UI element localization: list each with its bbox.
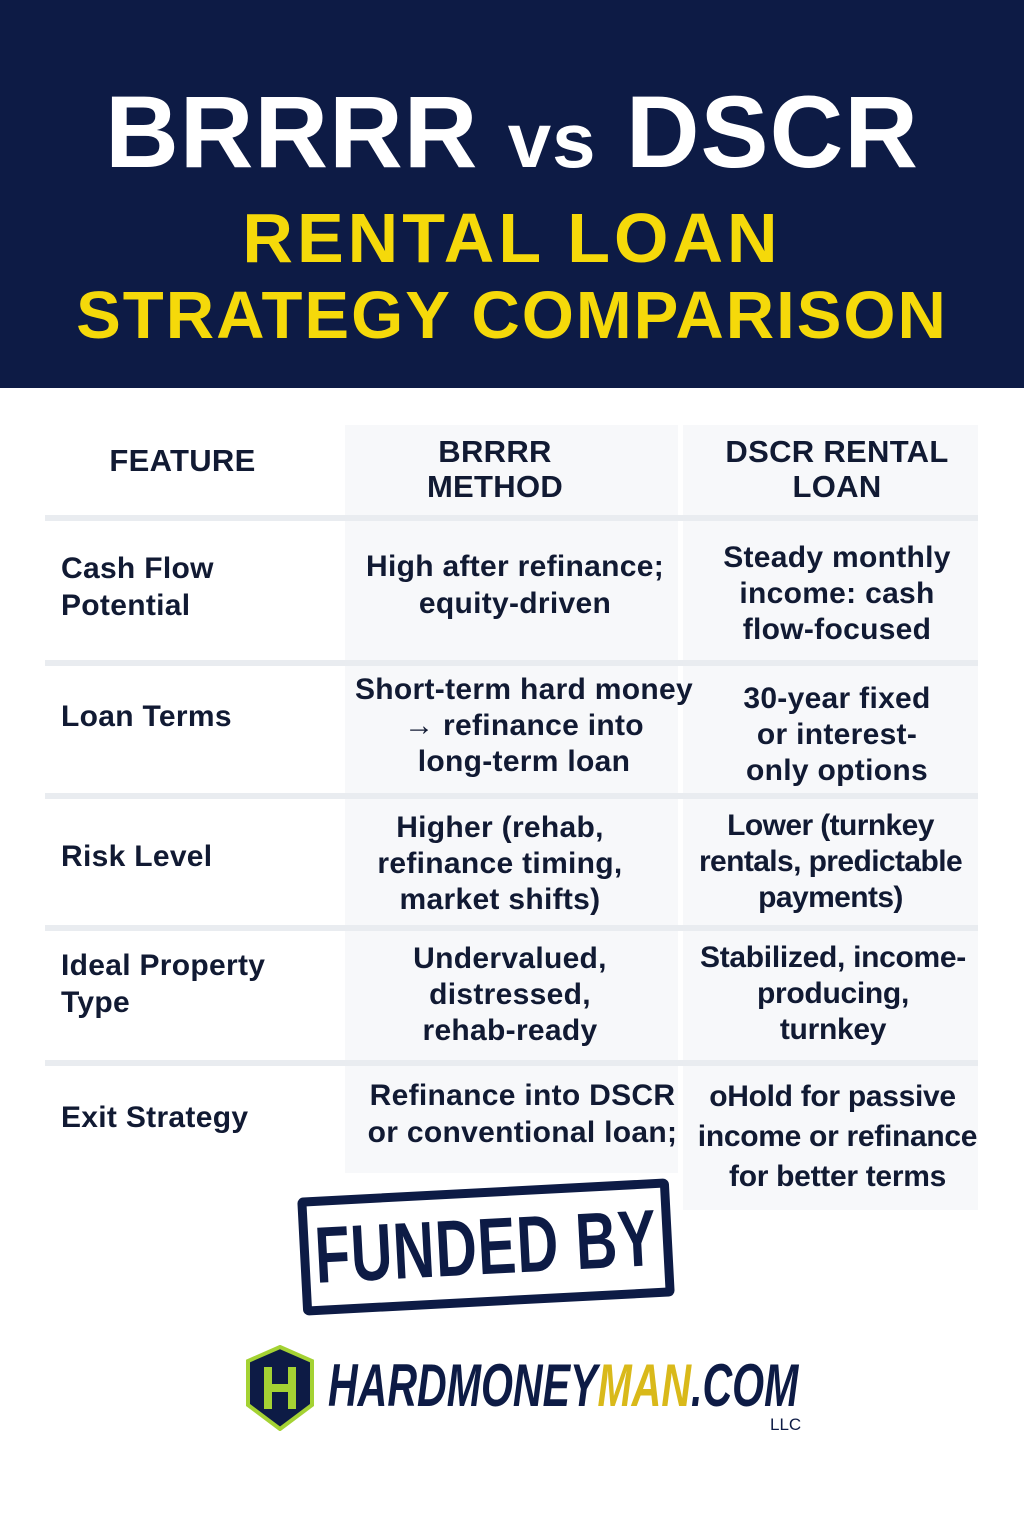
row: ideal property: Type [61,986,130,1019]
row: cash flow: equity-driven [419,587,611,620]
row: loan terms: only options [746,754,928,787]
row: cash flow: Potential [61,589,190,622]
row: loan terms [61,673,931,787]
row: exit strategy [61,1079,977,1193]
header: feature: FEATURE [109,443,256,478]
row: risk level: refinance timing, [377,847,623,880]
header: brrrr: BRRRR [438,434,552,469]
row: loan terms: → refinance into [404,709,644,742]
row: risk level: Higher (rehab, [396,811,604,844]
header: dscr [725,434,949,504]
row: exit strategy: income or refinance [698,1120,977,1153]
row: cash flow: Cash Flow [61,552,214,585]
row: loan terms: 30-year fixed [743,682,931,715]
subtitle line 1: RENTAL LOAN [242,199,782,277]
subtitle line 2: STRATEGY COMPARISON [76,278,948,353]
row: risk level: market shifts) [400,883,600,916]
row: ideal property: distressed, [429,978,591,1011]
row: ideal property: rehab-ready [422,1014,598,1047]
row: loan terms: or interest- [757,718,917,751]
header: brrrr [427,434,563,504]
row: risk level: Lower (turnkey [727,809,934,842]
row: ideal property: Stabilized, income- [700,941,966,974]
row: exit strategy: oHold for passive [709,1080,956,1113]
row: ideal property: producing, [757,977,909,1010]
comparison table [45,434,978,1193]
row: cash flow [61,541,951,646]
row: loan terms: Short-term hard money [355,673,693,706]
logo text: HARDMONEYMAN.COM [328,1352,798,1419]
row: exit strategy: or conventional loan; [368,1116,677,1149]
row: risk level: rentals, predictable [699,845,962,878]
header: brrrr: METHOD [427,469,563,504]
row: risk level: payments) [758,881,903,914]
header banner [0,0,1024,388]
logo [246,1345,801,1434]
header: dscr: LOAN [792,469,882,504]
row: exit strategy: for better terms [729,1160,946,1193]
row: cash flow: High after refinance; [366,550,664,583]
row: risk level [61,809,962,916]
row: loan terms: long-term loan [418,745,630,778]
header: dscr: DSCR RENTAL [725,434,949,469]
stamp: funded by: FUNDED BY [313,1193,659,1300]
llc: LLC [770,1415,801,1434]
row: exit strategy: Refinance into DSCR [370,1079,675,1112]
row: ideal property: Undervalued, [413,942,607,975]
row: risk level: Risk Level [61,840,212,873]
icon: shield [246,1345,314,1431]
row: cash flow: flow-focused [743,613,931,646]
row: cash flow: Steady monthly [723,541,951,574]
row: loan terms: Loan Terms [61,700,232,733]
row: exit strategy: Exit Strategy [61,1101,248,1134]
row: ideal property: Ideal Property [61,949,265,982]
row: ideal property [61,941,966,1047]
title: BRRRR vs DSCR [105,75,919,189]
row: cash flow: income: cash [739,577,935,610]
row: ideal property: turnkey [780,1013,886,1046]
